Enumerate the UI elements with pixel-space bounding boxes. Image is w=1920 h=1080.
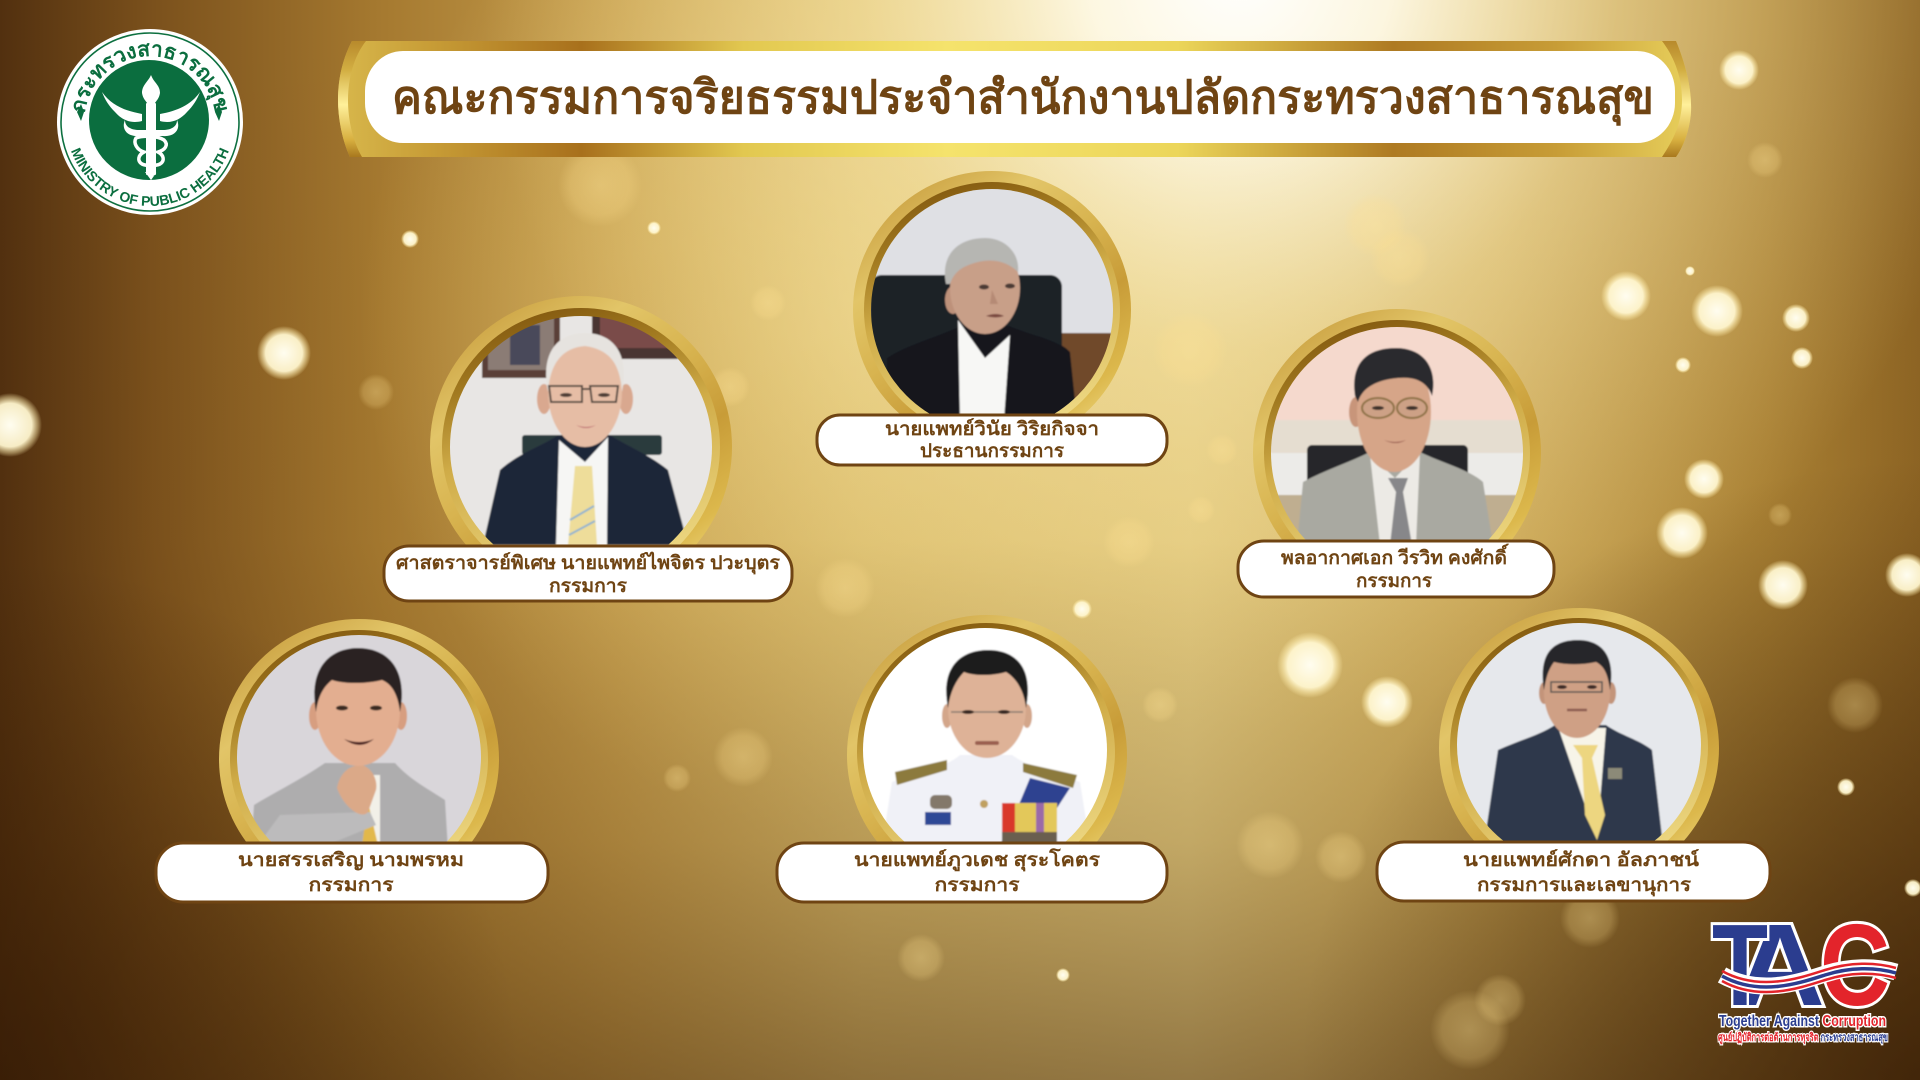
icon: caduceus emblem [77, 75, 222, 180]
label: chairman [817, 415, 1167, 465]
label: bottom left [156, 843, 548, 902]
label: bottom right: กรรมการและเลขานุการ [1477, 875, 1692, 897]
logo: TAC Together Against Corruption: A [1735, 900, 1825, 1030]
title text: คณะกรรมการจริยธรรมประจำสำนักงานปลัดกระทรวงสาธารณสุข [392, 71, 1654, 126]
title banner [338, 41, 1691, 157]
logo: Ministry of Public Health: กระทรวงสาธารณสุข [74, 43, 228, 112]
label: top left [384, 546, 792, 601]
portrait: bottom center [847, 615, 1127, 842]
label: chairman: ประธานกรรมการ [920, 441, 1065, 462]
portrait: top left [430, 296, 732, 544]
portrait: chairman, top center [853, 171, 1131, 414]
label: top left: กรรมการ [549, 576, 628, 597]
logo: TAC Together Against Corruption: Together Against Corruption [1719, 1013, 1886, 1030]
label: top right: กรรมการ [1356, 571, 1433, 592]
label: bottom center [777, 843, 1167, 902]
icon: flag ribbon [1722, 964, 1896, 992]
logo: TAC Together Against Corruption [1712, 900, 1896, 1045]
label: top right: พลอากาศเอก วีรวิท คงศักดิ์ [1281, 543, 1509, 569]
label: bottom center: กรรมการ [934, 875, 1020, 896]
label: top right [1238, 541, 1554, 597]
label: bottom center: นายแพทย์ภูวเดช สุระโคตร [854, 848, 1101, 872]
label: bottom left: กรรมการ [308, 875, 394, 896]
label: bottom right [1377, 842, 1770, 901]
label: top left: ศาสตราจารย์พิเศษ นายแพทย์ไพจิตร ปวะบุตร [396, 551, 781, 575]
label: bottom left: นายสรรเสริญ นามพรหม [238, 850, 464, 871]
portrait: bottom right [1439, 608, 1719, 840]
logo: TAC Together Against Corruption: T [1712, 900, 1768, 1030]
label: bottom right: นายแพทย์ศักดา อัลภาชน์ [1463, 849, 1699, 871]
label: chairman: นายแพทย์วินัย วิริยกิจจา [885, 418, 1099, 440]
logo: Ministry of Public Health [57, 29, 243, 215]
banner white pill [365, 51, 1675, 143]
banner gold frame [338, 41, 1691, 157]
logo: TAC Together Against Corruption: C [1820, 900, 1890, 1030]
logo: Ministry of Public Health: MINISTRY OF PUBLIC HEALTH [71, 148, 229, 206]
portrait: bottom left [219, 619, 499, 842]
logo: TAC Together Against Corruption: ศูนย์ปฏิบัติการต่อต้านการทุจริต กระทรวงสาธารณสุข [1718, 1031, 1888, 1045]
portrait: top right [1253, 309, 1541, 540]
